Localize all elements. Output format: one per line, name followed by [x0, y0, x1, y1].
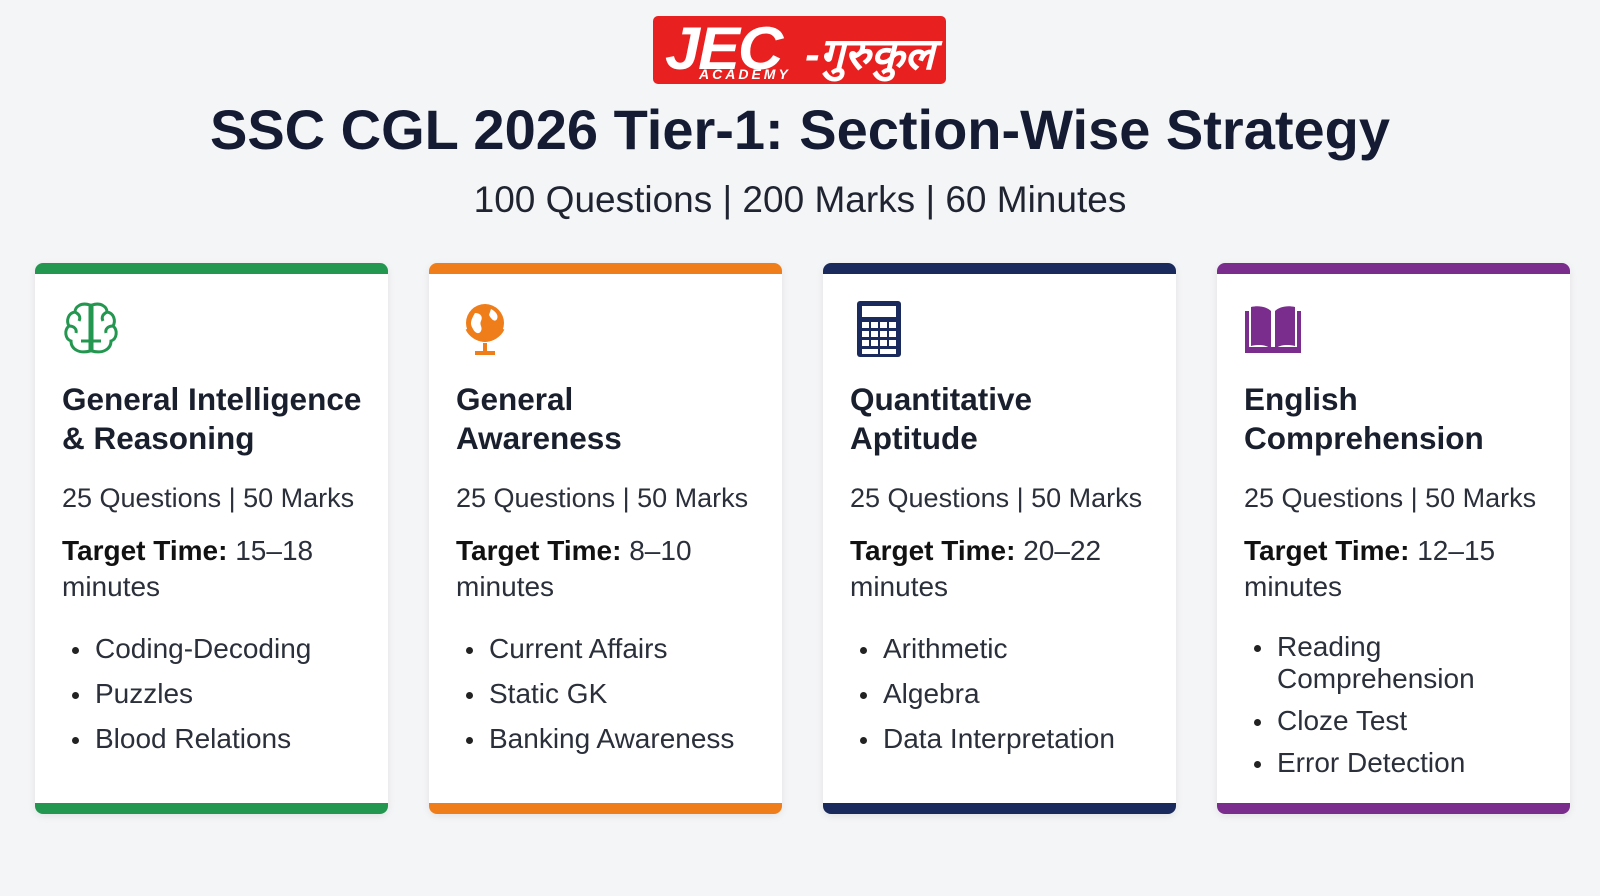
topics list: Algebra — [883, 678, 980, 709]
meta: 25 Questions | 50 Marks — [850, 483, 1142, 513]
heading — [456, 381, 622, 456]
heading: General Intelligence — [62, 381, 361, 417]
icon: book — [1245, 306, 1301, 353]
topics list — [860, 633, 1115, 754]
topics list: Current Affairs — [489, 633, 667, 664]
topics list: Coding-Decoding — [95, 633, 311, 664]
target time — [62, 535, 313, 602]
heading: Comprehension — [1244, 420, 1484, 456]
target time: Target Time: 12–15 — [1244, 535, 1495, 566]
meta: 25 Questions | 50 Marks — [62, 483, 354, 513]
icon: brain — [64, 302, 118, 354]
topics list: Blood Relations — [95, 723, 291, 754]
topics list: Comprehension — [1277, 663, 1475, 694]
target time: Target Time: 8–10 — [456, 535, 692, 566]
meta: 25 Questions | 50 Marks — [1244, 483, 1536, 513]
topics list: Banking Awareness — [489, 723, 734, 754]
target time: minutes — [62, 571, 160, 602]
target time: Target Time: 20–22 — [850, 535, 1101, 566]
logo — [653, 16, 946, 84]
icon: calculator — [857, 301, 901, 357]
logo: JEC — [665, 16, 781, 82]
heading — [850, 381, 1032, 456]
topics list — [1254, 631, 1475, 778]
icon: globe — [466, 304, 504, 355]
panel: awareness — [429, 263, 782, 814]
target time — [456, 535, 692, 602]
topics list: Static GK — [489, 678, 607, 709]
target time: minutes — [850, 571, 948, 602]
topics list: Puzzles — [95, 678, 193, 709]
heading — [1244, 381, 1484, 456]
heading — [62, 381, 361, 456]
heading: English — [1244, 381, 1358, 417]
logo: -गुरुकुल — [805, 30, 934, 79]
topics list: Reading — [1277, 631, 1381, 662]
topics list: Data Interpretation — [883, 723, 1115, 754]
topics list: Error Detection — [1277, 747, 1465, 778]
heading: Awareness — [456, 420, 622, 456]
target time: Target Time: 15–18 — [62, 535, 313, 566]
topics list — [466, 633, 734, 754]
panel: english — [1217, 263, 1570, 814]
logo: ACADEMY — [699, 66, 791, 82]
panel: quant — [823, 263, 1176, 814]
topics list — [72, 633, 311, 754]
subtitle: 100 Questions | 200 Marks | 60 Minutes — [474, 179, 1126, 220]
target time: minutes — [1244, 571, 1342, 602]
target time — [1244, 535, 1495, 602]
heading: Quantitative — [850, 381, 1032, 417]
title: SSC CGL 2026 Tier-1: Section-Wise Strategy — [210, 98, 1390, 161]
heading: Aptitude — [850, 420, 978, 456]
target time: minutes — [456, 571, 554, 602]
topics list: Cloze Test — [1277, 705, 1407, 736]
heading: & Reasoning — [62, 420, 255, 456]
meta: 25 Questions | 50 Marks — [456, 483, 748, 513]
heading: General — [456, 381, 573, 417]
topics list: Arithmetic — [883, 633, 1007, 664]
target time — [850, 535, 1101, 602]
panel: reasoning — [35, 263, 388, 814]
